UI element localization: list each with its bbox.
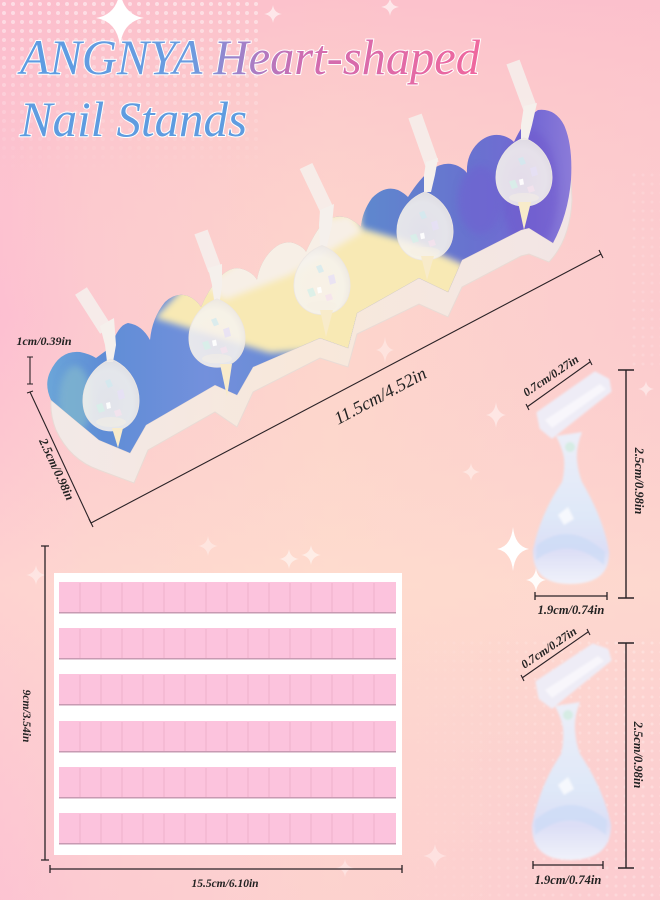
dimension: tray length (89, 250, 603, 527)
dimension: strips width (50, 865, 402, 890)
strip 4 (59, 721, 396, 752)
strip 1 (59, 582, 396, 614)
title (17, 29, 481, 147)
nail stand 5 (496, 62, 552, 230)
heart-shaped tray (40, 62, 580, 483)
stand dimensions: 0.7cm/0.27in (520, 352, 581, 399)
stand dimensions: 2.5cm/0.98in (632, 447, 646, 514)
dimension: strips height (20, 546, 49, 860)
dimension: strips height: 9cm/3.54in (20, 690, 32, 742)
dimension: tray height: 1cm/0.39in (16, 334, 72, 348)
stand dimensions: 0.7cm/0.27in (518, 624, 579, 671)
nail stand 3 (294, 166, 350, 337)
dimension: tray depth (27, 391, 91, 523)
dimension: tray height (16, 334, 72, 384)
title: ANGNYA Heart-shaped (17, 29, 481, 85)
strip 2 (59, 628, 396, 660)
nail stand 2 (189, 232, 245, 397)
stand body (532, 645, 611, 860)
tray front edge (51, 180, 572, 483)
stand dimensions: 2.5cm/0.98in (631, 721, 645, 788)
title: Nail Stands (19, 91, 247, 147)
stand dimensions (518, 624, 645, 887)
nail stand 1 (81, 291, 139, 448)
stand dimensions (520, 352, 646, 617)
strip 5 (59, 767, 396, 798)
stand dimensions: 1.9cm/0.74in (538, 603, 604, 617)
dimension: tray depth: 2.5cm/0.98in (36, 435, 77, 503)
strip 6 (59, 813, 396, 844)
dimension: strips width: 15.5cm/6.10in (191, 878, 259, 890)
small stand bottom (518, 624, 645, 887)
stand dimensions: 1.9cm/0.74in (535, 873, 601, 887)
small stand top (520, 352, 646, 617)
tray top face (40, 100, 580, 460)
panel: nail practice strips (54, 573, 402, 855)
stand body (533, 373, 610, 584)
dimension: tray length: 11.5cm/4.52in (331, 363, 430, 428)
nail stand 4 (397, 116, 453, 280)
strip 3 (59, 674, 396, 706)
